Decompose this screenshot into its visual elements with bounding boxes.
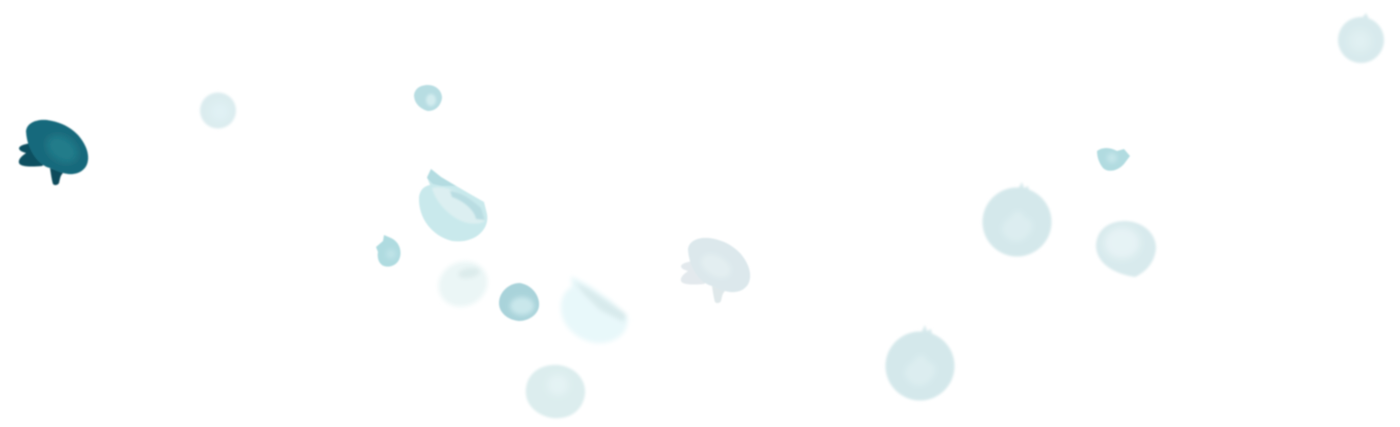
jellyfish: blurred open bell bbox=[561, 276, 628, 343]
jellyfish: pale round top-left bbox=[200, 92, 236, 128]
jellyfish: large open bell bbox=[419, 169, 487, 241]
jellyfish: small teal left of centre bbox=[376, 235, 401, 267]
jellyfish: pale round with stalk, upper right bbox=[982, 182, 1052, 256]
jellyfish: blurred pale bell bbox=[431, 253, 495, 315]
jellyfish: pale round top right bbox=[1338, 13, 1384, 63]
jellyfish: pale grey side view bbox=[681, 238, 750, 303]
jellyfish: pale round right bbox=[1096, 221, 1156, 277]
jellyfish: small round centre-top bbox=[414, 85, 442, 111]
jellyfish: pale round bottom centre bbox=[526, 365, 585, 418]
jellyfish: pale round with stalk, lower right bbox=[886, 325, 954, 400]
jellyfish: round teal centre bbox=[499, 283, 539, 321]
jellyfish: small teal right bbox=[1097, 148, 1130, 171]
jellyfish: dark teal side view bbox=[19, 120, 88, 185]
